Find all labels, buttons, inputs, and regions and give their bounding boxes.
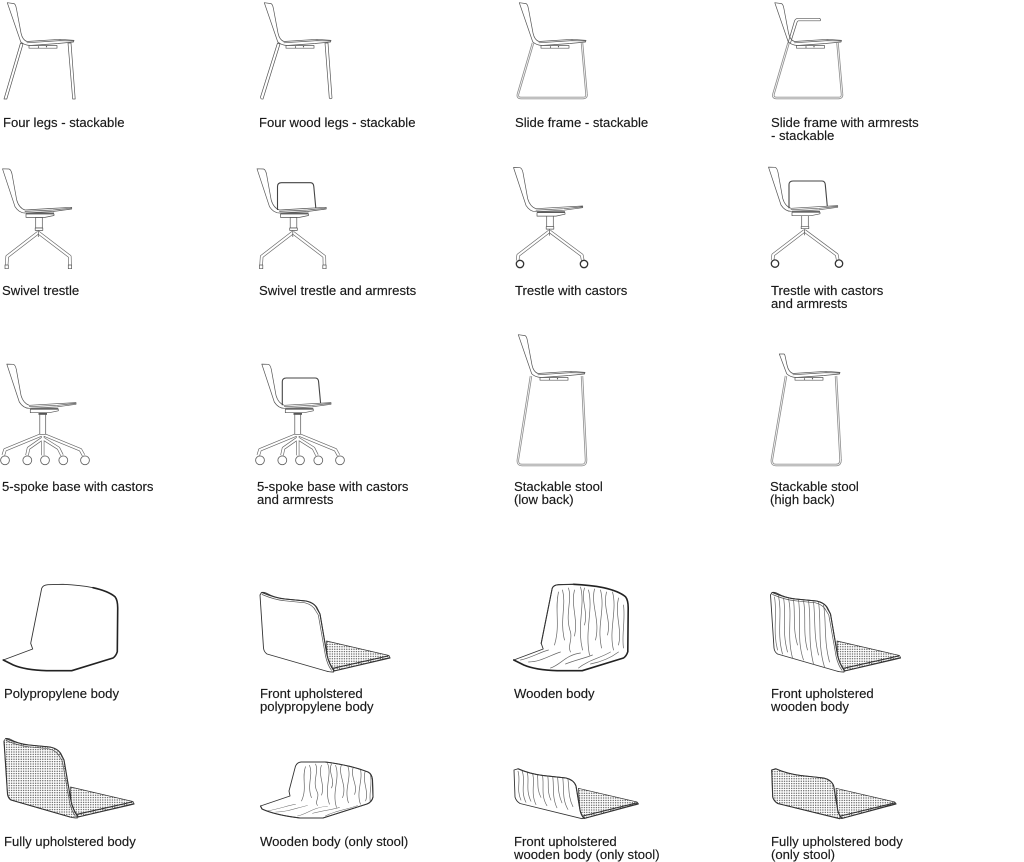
label: 5-spoke base with castors <box>257 479 408 494</box>
option: stool high back <box>770 354 859 507</box>
label: (only stool) <box>771 847 835 862</box>
label: Stackable stool <box>770 479 859 494</box>
label: 5-spoke base with castors <box>2 479 154 494</box>
label: and armrests <box>257 492 334 507</box>
icon: stackable stool <box>518 335 586 465</box>
icon: fully upholstered stool shell <box>772 769 896 819</box>
label: Front upholstered <box>771 686 874 701</box>
option: wooden body <box>514 584 628 701</box>
icon: 5-spoke chair <box>1 364 89 465</box>
option: front upholstered wooden body <box>770 592 900 714</box>
label: Polypropylene body <box>4 686 119 701</box>
label: wooden body (only stool) <box>513 847 660 862</box>
label: Wooden body (only stool) <box>260 834 408 849</box>
option: 5-spoke base <box>1 364 154 494</box>
label: polypropylene body <box>260 699 374 714</box>
option: stool low back <box>514 335 603 507</box>
label: Slide frame with armrests <box>771 115 919 130</box>
icon: swivel trestle chair with armrest <box>257 169 326 269</box>
icon: front upholstered wooden stool shell <box>514 769 638 819</box>
option: four legs <box>3 3 125 130</box>
option: 5-spoke base and armrests <box>256 364 409 507</box>
label: - stackable <box>771 128 834 143</box>
icon: front upholstered wooden shell <box>770 592 900 672</box>
label: Trestle with castors <box>515 283 628 298</box>
label: Slide frame - stackable <box>515 115 648 130</box>
option: slide frame <box>515 3 648 130</box>
icon: trestle chair with castors <box>514 168 588 268</box>
icon: polypropylene shell <box>3 584 118 671</box>
option: swivel trestle <box>2 169 79 298</box>
icon: 5-spoke chair with armrest <box>256 364 344 465</box>
option: four wood legs <box>259 3 415 130</box>
label: (high back) <box>770 492 835 507</box>
label: Front upholstered <box>260 686 363 701</box>
label: Four wood legs - stackable <box>259 115 415 130</box>
icon: front upholstered shell <box>260 592 390 672</box>
label: Fully upholstered body <box>771 834 903 849</box>
icon: stackable stool high back <box>772 354 841 465</box>
icon: four wood legs chair <box>260 3 332 99</box>
label: Swivel trestle and armrests <box>259 283 417 298</box>
label: (low back) <box>514 492 574 507</box>
label: Front upholstered <box>514 834 617 849</box>
option: polypropylene body <box>3 584 119 701</box>
icon: four legs chair <box>4 3 75 99</box>
label: wooden body <box>770 699 849 714</box>
option: fully upholstered body <box>4 738 136 849</box>
label: and armrests <box>771 296 848 311</box>
label: Stackable stool <box>514 479 603 494</box>
icon: trestle chair with castors and armrest <box>768 167 843 267</box>
option: wooden body only stool <box>260 762 408 849</box>
icon: wooden stool shell <box>260 762 373 818</box>
option: slide frame with armrests <box>771 3 919 143</box>
icon: slide frame chair with armrest <box>773 3 842 98</box>
option: front upholstered wooden body only stool <box>513 769 660 862</box>
label: Trestle with castors <box>771 283 883 298</box>
label: Four legs - stackable <box>3 115 125 130</box>
option: front upholstered polypropylene body <box>260 592 390 714</box>
option: fully upholstered body only stool <box>771 769 903 862</box>
icon: slide frame chair <box>518 3 587 98</box>
option: trestle with castors and armrests <box>768 167 884 311</box>
icon: fully upholstered shell <box>4 738 134 818</box>
option: trestle with castors <box>514 168 628 298</box>
label: Fully upholstered body <box>4 834 136 849</box>
label: Wooden body <box>514 686 595 701</box>
icon: swivel trestle chair <box>2 169 72 269</box>
label: Swivel trestle <box>2 283 79 298</box>
option: swivel trestle and armrests <box>257 169 417 298</box>
icon: wooden shell <box>514 584 628 671</box>
